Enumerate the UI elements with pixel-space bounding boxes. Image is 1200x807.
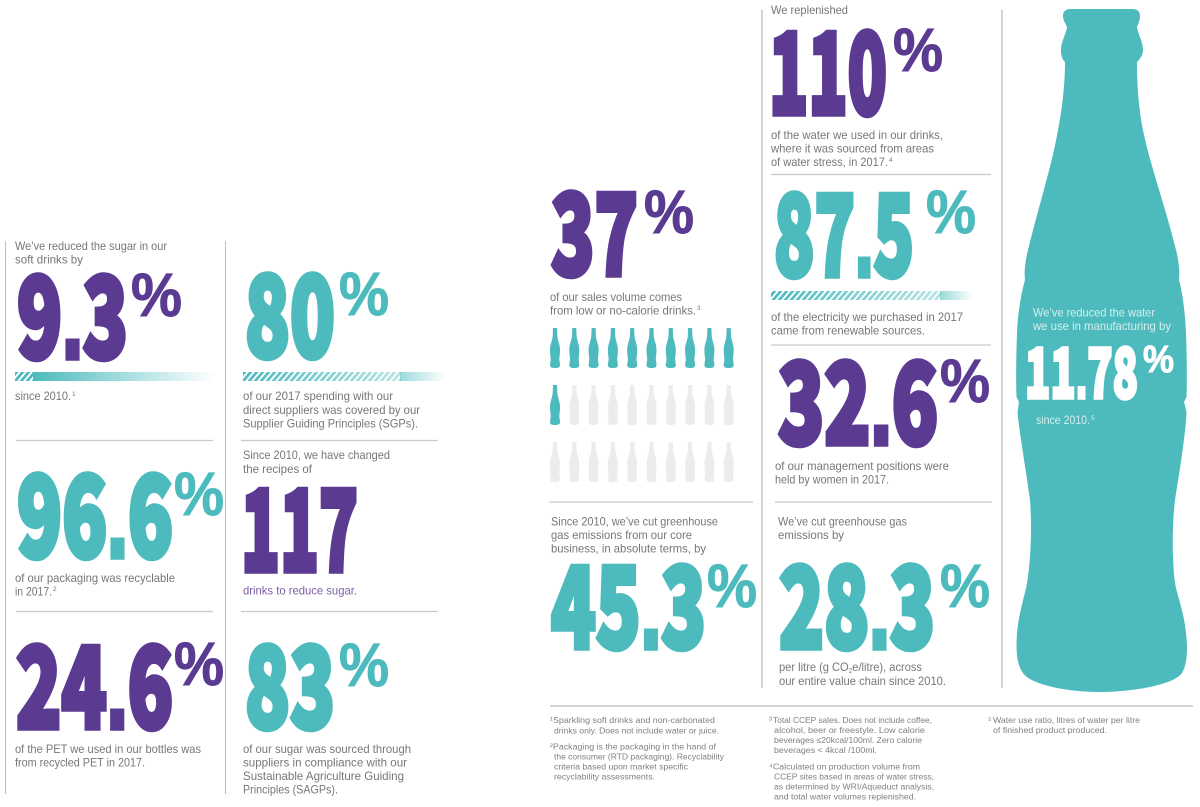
panel: water replenished 110%: We replenished xyxy=(771,3,848,17)
panel: value chain emissions 28.3%: our entire value chain since 2010. xyxy=(779,674,946,688)
panel: women in management 32.6%: of our management positions were xyxy=(775,459,949,473)
panel: sustainable sugar 83%: 83 xyxy=(245,599,335,761)
footnotes 3 and 4: beverages < 4kcal /100ml. xyxy=(774,745,877,755)
footnotes 1 and 2: Sparkling soft drinks and non-carbonated xyxy=(553,715,715,725)
panel: core business emissions 45.3%: 45.3 xyxy=(551,519,706,681)
footnotes 3 and 4: as determined by WRI/Aqueduct analysis, xyxy=(774,782,934,792)
panel: sugar reduced 9.3%: We’ve reduced the sugar in our xyxy=(15,239,167,253)
panel: suppliers 80%: % xyxy=(339,260,389,328)
panel: recyclable packaging 96.6%: % xyxy=(174,460,224,528)
panel: renewable electricity 87.5%: came from renewable sources. xyxy=(771,324,925,338)
panel: water bottle 11.78%: % xyxy=(1143,339,1174,381)
footnotes 1 and 2: the consumer (RTD packaging). Recyclability xyxy=(554,752,725,762)
footnotes 3 and 4: alcohol, beer or freestyle. Low calorie xyxy=(774,725,925,735)
panel: sustainable sugar 83%: of our sugar was sourced through xyxy=(243,742,411,756)
panel: core business emissions 45.3%: business, in absolute terms, by xyxy=(551,542,706,556)
panel: renewable electricity 87.5% xyxy=(771,147,976,338)
panel: sugar reduced 9.3%: since 2010. xyxy=(15,389,71,403)
panel: recipes changed 117: 117 xyxy=(241,442,358,604)
panel: sustainable sugar 83% xyxy=(243,599,411,796)
panel: value chain emissions 28.3%: 28.3 xyxy=(779,519,935,681)
footnotes 3 and 4: ⁴ xyxy=(769,762,773,772)
panel: water replenished 110%: of the water we used in our drinks, xyxy=(771,128,943,142)
panel: recyclable packaging 96.6%: 2 xyxy=(53,586,57,593)
panel: core business emissions 45.3%: % xyxy=(707,552,757,620)
panel: sustainable sugar 83%: Sustainable Agriculture Guiding xyxy=(243,769,404,783)
panel: recyclable packaging 96.6%: 96.6 xyxy=(17,428,173,590)
panel: recyclable packaging 96.6%: in 2017. xyxy=(15,584,52,598)
panel: recycled PET 24.6%: % xyxy=(174,630,224,698)
footnotes 3 and 4: Calculated on production volume from xyxy=(773,762,920,772)
footnote 5 xyxy=(988,715,1140,735)
panel: low calorie sales 37%: from low or no-calorie drinks. xyxy=(550,304,696,318)
footnotes 3 and 4: beverages ≤20kcal/100ml. Zero calorie xyxy=(774,735,922,745)
panel: water replenished 110%: 4 xyxy=(889,157,893,164)
panel: value chain emissions 28.3%: e/litre), across xyxy=(852,660,922,674)
panel: renewable electricity 87.5%: % xyxy=(926,178,976,246)
panel: sugar reduced 9.3%: 9.3 xyxy=(17,229,128,391)
panel: value chain emissions 28.3%: % xyxy=(940,552,990,620)
panel: women in management 32.6%: % xyxy=(940,347,990,415)
panel: recycled PET 24.6%: of the PET we used in our bottles was xyxy=(15,742,201,756)
footnotes 3 and 4: CCEP sites based in areas of water stress, xyxy=(774,772,934,782)
panel: recipes changed 117: drinks to reduce sugar. xyxy=(243,584,357,598)
panel: water replenished 110%: of water stress, in 2017. xyxy=(771,155,888,169)
panel: sustainable sugar 83%: % xyxy=(339,631,389,699)
panel: sustainable sugar 83%: suppliers in compliance with our xyxy=(243,756,407,770)
footnotes 3 and 4: Total CCEP sales. Does not include coffee, xyxy=(773,715,932,725)
footnotes xyxy=(550,706,1193,802)
footnote 5: ⁵ xyxy=(988,715,992,725)
panel: renewable electricity 87.5%: 87.5 xyxy=(774,147,914,309)
footnotes 3 and 4: ³ xyxy=(769,715,772,725)
bottle pictogram: second row, one teal and nine grey xyxy=(550,385,734,425)
footnote 5: Water use ratio, litres of water per litre xyxy=(993,715,1140,725)
footnotes 1 and 2: Packaging is the packaging in the hand of xyxy=(553,742,717,752)
panel: low calorie sales 37%: % xyxy=(644,178,694,246)
footnotes 1 and 2: recyclability assessments. xyxy=(554,772,655,782)
panel: suppliers 80% xyxy=(243,228,446,430)
panel: women in management 32.6%: held by women in 2017. xyxy=(775,472,889,486)
panel: water bottle 11.78%: we use in manufacturing by xyxy=(1032,319,1171,333)
panel: water bottle 11.78%: We’ve reduced the water xyxy=(1033,306,1155,320)
panel: water bottle 11.78% xyxy=(1016,9,1187,692)
panel: water bottle 11.78%: 5 xyxy=(1091,415,1095,422)
panel: water replenished 110%: where it was sourced from areas xyxy=(770,142,934,156)
footnotes 1 and 2: ² xyxy=(550,742,553,752)
panel: women in management 32.6%: 32.6 xyxy=(778,315,938,477)
panel: low calorie sales 37%: of our sales volume comes xyxy=(550,290,682,304)
icon: large bottle silhouette xyxy=(1016,9,1187,692)
bottle pictogram: third row, grey xyxy=(550,442,734,482)
panel: sugar reduced 9.3% xyxy=(15,229,215,403)
footnotes 1 and 2: drinks only. Does not include water or juice. xyxy=(554,725,719,735)
panel: suppliers 80%: of our 2017 spending with our xyxy=(243,389,393,403)
panel: sustainable sugar 83%: Principles (SAGPs). xyxy=(243,782,338,796)
panel: water bottle 11.78%: since 2010. xyxy=(1036,413,1090,427)
panel: recipes changed 117: the recipes of xyxy=(243,462,313,476)
footnotes 1 and 2: criteria based upon market specific xyxy=(554,762,689,772)
footnotes 3 and 4: and total water volumes replenished. xyxy=(774,792,916,802)
panel: suppliers 80%: 80 xyxy=(245,228,335,390)
panel: low calorie sales 37%: 37 xyxy=(551,146,638,308)
panel: renewable electricity 87.5%: of the electricity we purchased in 2017 xyxy=(771,310,963,324)
footnotes 1 and 2 xyxy=(550,715,725,782)
panel: value chain emissions 28.3%: We’ve cut greenhouse gas xyxy=(778,514,907,528)
bottle pictogram: first row, teal xyxy=(550,328,734,368)
panel: core business emissions 45.3%: gas emissions from our core xyxy=(551,528,692,542)
panel: sugar reduced 9.3%: 1 xyxy=(72,391,76,398)
panel: low calorie sales 37%: 3 xyxy=(697,305,701,312)
panel: sugar reduced 9.3%: % xyxy=(131,261,182,329)
panel: value chain emissions 28.3%: per litre (g CO xyxy=(779,660,854,674)
footnote 5: of finished product produced. xyxy=(993,725,1107,735)
panel: water bottle 11.78%: 11.78 xyxy=(1025,318,1138,418)
panel: recyclable packaging 96.6%: of our packaging was recyclable xyxy=(15,571,175,585)
panel: value chain emissions 28.3%: emissions by xyxy=(778,528,844,542)
panel: water replenished 110%: % xyxy=(893,16,943,84)
panel: suppliers 80%: Supplier Guiding Principles (SGPs). xyxy=(243,416,418,430)
footnotes 3 and 4 xyxy=(769,715,934,802)
panel: suppliers 80%: direct suppliers was covered by our xyxy=(243,403,420,417)
footnotes 1 and 2: ¹ xyxy=(550,715,553,725)
panel: value chain emissions 28.3%: 2 xyxy=(849,668,852,675)
panel: recipes changed 117: Since 2010, we have changed xyxy=(243,448,390,462)
panel: core business emissions 45.3%: Since 2010, we’ve cut greenhouse xyxy=(551,514,718,528)
panel: recycled PET 24.6%: 24.6 xyxy=(16,599,173,761)
panel: recycled PET 24.6%: from recycled PET in 2017. xyxy=(15,756,145,770)
panel: sugar reduced 9.3%: soft drinks by xyxy=(15,252,83,266)
